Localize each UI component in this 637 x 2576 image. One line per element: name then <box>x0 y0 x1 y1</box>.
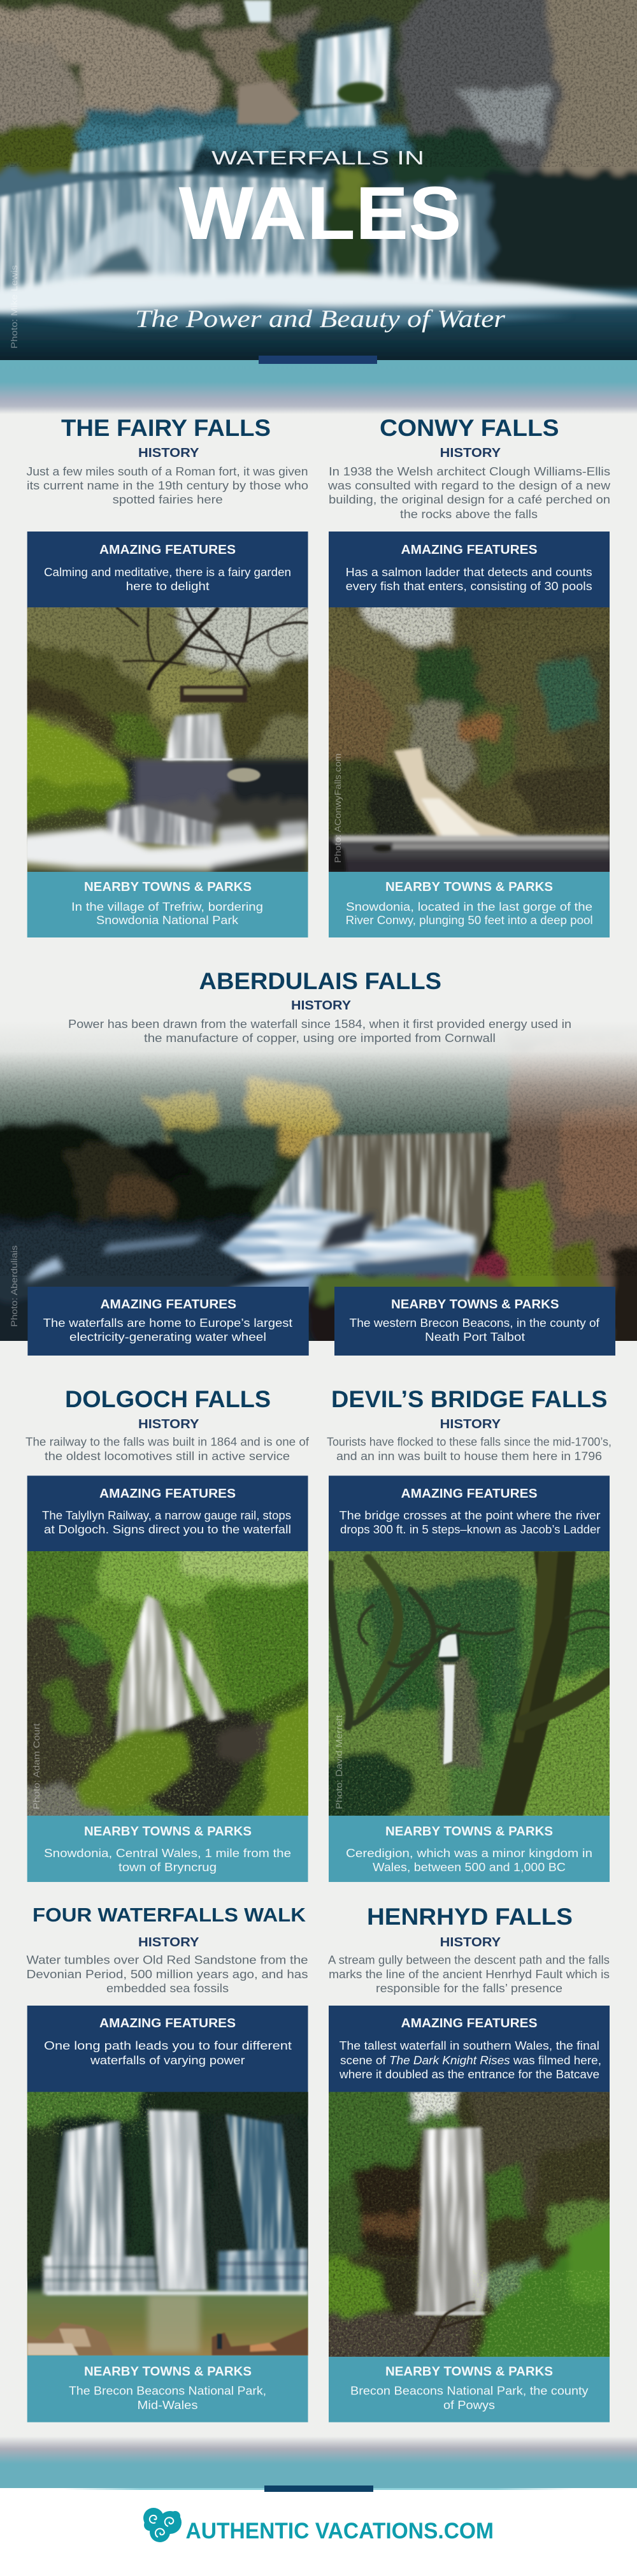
history text: the manufacture of copper, using ore imported from Cornwall <box>144 1032 496 1045</box>
box: amazing features: electricity-generating water wheel <box>69 1331 266 1343</box>
box: nearby towns and parks <box>329 2357 610 2422</box>
box: nearby towns and parks: The western Brecon Beacons, in the county of <box>349 1317 600 1329</box>
heading: dolgoch falls: DOLGOCH FALLS <box>65 1386 271 1412</box>
hero subtitle: The Power and Beauty of Water <box>135 305 506 333</box>
history text <box>25 1436 310 1463</box>
box: amazing features: here to delight <box>126 580 210 593</box>
history text: Just a few miles south of a Roman fort, it was given <box>27 465 308 478</box>
heading: aberdulais falls: ABERDULAIS FALLS <box>199 968 441 994</box>
history text: Tourists have flocked to these falls since the mid-1700’s, <box>327 1436 612 1449</box>
box: nearby towns and parks: NEARBY TOWNS & PARKS <box>84 2364 252 2378</box>
box: amazing features: waterfalls of varying power <box>90 2054 245 2067</box>
history text <box>68 1018 571 1045</box>
history text <box>27 1954 308 1995</box>
history text: Power has been drawn from the waterfall since 1584, when it first provided energy used in <box>68 1018 571 1031</box>
photo credit: aberdulais: Photo: Aberduliais <box>9 1245 19 1327</box>
box: amazing features <box>27 1476 308 1551</box>
box: nearby towns and parks: NEARBY TOWNS & PARKS <box>385 1825 553 1839</box>
history text: the rocks above the falls <box>400 508 538 521</box>
bottom accent bar <box>264 2486 373 2492</box>
photo credit: hero: Photo: Mike Lewis <box>9 265 19 349</box>
box: amazing features <box>27 2006 308 2092</box>
box: amazing features <box>27 1287 309 1356</box>
box: amazing features: where it doubled as the entrance for the Batcave <box>339 2068 599 2081</box>
box: nearby towns and parks <box>27 2355 308 2422</box>
box: nearby towns and parks: Snowdonia, Central Wales, 1 mile from the <box>44 1847 291 1860</box>
box: amazing features: The Talyllyn Railway, a narrow gauge rail, stops <box>42 1509 291 1522</box>
photo: aberdulais falls <box>0 1034 637 1341</box>
photo: conwy falls <box>329 607 610 872</box>
history text: responsible for the falls’ presence <box>376 1982 562 1995</box>
photo: dolgoch falls <box>27 1551 308 1816</box>
hero title line: waterfalls in: WATERFALLS IN <box>211 147 424 169</box>
history text: marks the line of the ancient Henrhyd Fault which is <box>329 1968 610 1981</box>
history text: building, the original design for a café perched on <box>329 493 610 506</box>
box: amazing features: One long path leads you to four different <box>44 2039 292 2052</box>
logo: authentic vacations <box>143 2508 494 2543</box>
panel: aberdulais falls <box>0 968 637 1359</box>
box: nearby towns and parks: The Brecon Beacons National Park, <box>69 2385 266 2398</box>
hero title: wales: WALES <box>178 171 461 256</box>
box: nearby towns and parks: town of Bryncrug <box>118 1861 217 1874</box>
box: nearby towns and parks: NEARBY TOWNS & PARKS <box>84 880 252 894</box>
box: amazing features <box>329 2006 610 2092</box>
panel: henrhyd falls <box>310 1904 628 2422</box>
footer background <box>0 2488 637 2576</box>
top falls <box>312 27 390 106</box>
history text: The railway to the falls was built in 1864 and is one of <box>25 1436 310 1449</box>
history text: and an inn was built to house them here in 1796 <box>336 1450 602 1463</box>
box: nearby towns and parks <box>27 872 308 937</box>
box: nearby towns and parks: Snowdonia, located in the last gorge of the <box>346 901 592 913</box>
subheading: history: HISTORY <box>138 1936 199 1950</box>
subheading: history: HISTORY <box>440 446 501 460</box>
photo: henrhyd falls <box>329 2092 610 2357</box>
photo: devil's bridge falls <box>329 1551 610 1816</box>
history text <box>327 1436 612 1463</box>
box: amazing features: The tallest waterfall in southern Wales, the final <box>339 2039 599 2052</box>
box: amazing features <box>27 532 308 607</box>
top gradient band <box>0 360 637 414</box>
box: amazing features: The waterfalls are home to Europe’s largest <box>43 1317 292 1329</box>
history text <box>327 465 611 521</box>
box: amazing features: AMAZING FEATURES <box>401 2016 538 2030</box>
top accent bar <box>259 356 377 364</box>
box: nearby towns and parks: NEARBY TOWNS & PARKS <box>391 1298 559 1312</box>
top fade over aberdulais photo <box>0 1021 637 1212</box>
box: nearby towns and parks: Snowdonia National Park <box>96 914 239 927</box>
history text <box>27 465 308 506</box>
box: nearby towns and parks: Mid-Wales <box>138 2399 197 2412</box>
history text: embedded sea fossils <box>106 1982 229 1995</box>
bottom highlight line <box>64 2488 573 2490</box>
history text: its current name in the 19th century by those who <box>27 479 308 492</box>
box: nearby towns and parks <box>329 872 610 937</box>
heading: conwy falls: CONWY FALLS <box>380 415 559 441</box>
photo: fairy falls <box>27 607 308 872</box>
box: amazing features: every fish that enters, consisting of 30 pools <box>346 580 592 593</box>
photo credit: devil's bridge: Photo: David Merrett <box>334 1715 344 1809</box>
heading: henrhyd falls: HENRHYD FALLS <box>367 1904 573 1930</box>
subheading: history: HISTORY <box>440 1936 501 1950</box>
box: amazing features: AMAZING FEATURES <box>101 1298 236 1312</box>
box: amazing features: AMAZING FEATURES <box>99 1487 236 1501</box>
history text: Water tumbles over Old Red Sandstone from the <box>27 1954 308 1967</box>
box: amazing features <box>329 532 610 607</box>
photo credit: conwy: Photo: AConwyFalls.com <box>333 753 343 863</box>
box: nearby towns and parks <box>334 1287 615 1356</box>
subheading: history: HISTORY <box>291 999 352 1013</box>
history text: spotted fairies here <box>113 493 223 506</box>
bottom gradient band <box>0 2436 637 2488</box>
box: amazing features: AMAZING FEATURES <box>99 2016 236 2030</box>
box: nearby towns and parks <box>329 1816 610 1882</box>
panel: the fairy falls <box>8 415 327 937</box>
subheading: history: HISTORY <box>440 1417 501 1431</box>
box: amazing features: AMAZING FEATURES <box>401 543 538 557</box>
panel: four waterfalls walk <box>8 1904 326 2422</box>
photo credit: dolgoch: Photo: Adam Court <box>31 1723 41 1809</box>
box: nearby towns and parks: NEARBY TOWNS & PARKS <box>84 1825 252 1839</box>
panel: conwy falls <box>310 415 628 937</box>
box: nearby towns and parks: Wales, between 500 and 1,000 BC <box>373 1861 566 1874</box>
subheading: history: HISTORY <box>138 446 199 460</box>
box: nearby towns and parks <box>27 1816 308 1882</box>
hero section <box>0 0 637 373</box>
panel: dolgoch falls <box>8 1386 327 1882</box>
history text: Devonian Period, 500 million years ago, and has <box>27 1968 308 1981</box>
box: amazing features: drops 300 ft. in 5 steps–known as Jacob’s Ladder <box>340 1523 601 1536</box>
panel: devil's bridge falls <box>310 1386 628 1882</box>
wordmark: AUTHENTIC VACATIONS.COM <box>186 2519 494 2543</box>
box: nearby towns and parks: Brecon Beacons National Park, the county <box>350 2385 589 2398</box>
hero photo: tiered waterfall <box>0 0 637 360</box>
box: nearby towns and parks: River Conwy, plunging 50 feet into a deep pool <box>346 914 593 927</box>
falls strands <box>117 1595 194 1742</box>
history text: the oldest locomotives still in active service <box>45 1450 290 1463</box>
icon: triple spiral cloud <box>143 2508 182 2542</box>
box: nearby towns and parks: NEARBY TOWNS & PARKS <box>385 880 553 894</box>
box: nearby towns and parks: Ceredigion, which was a minor kingdom in <box>346 1847 592 1860</box>
heading: devil's bridge falls: DEVIL’S BRIDGE FALLS <box>331 1386 608 1412</box>
subheading: history: HISTORY <box>138 1417 199 1431</box>
box: amazing features: Has a salmon ladder that detects and counts <box>346 566 592 579</box>
box: amazing features: scene of The Dark Knight Rises was filmed here, <box>340 2054 601 2067</box>
box: amazing features: AMAZING FEATURES <box>99 543 236 557</box>
box: amazing features <box>329 1476 610 1551</box>
box: amazing features: The bridge crosses at the point where the river <box>339 1509 600 1522</box>
box: nearby towns and parks: NEARBY TOWNS & PARKS <box>385 2364 553 2378</box>
box: nearby towns and parks: In the village of Trefriw, bordering <box>71 901 263 913</box>
history text: was consulted with regard to the design of a new <box>327 479 611 492</box>
history text: A stream gully between the descent path and the falls <box>328 1954 610 1967</box>
box: nearby towns and parks: Neath Port Talbot <box>425 1331 525 1343</box>
history text <box>328 1954 610 1995</box>
history text: In 1938 the Welsh architect Clough Williams-Ellis <box>329 465 610 478</box>
heading: four waterfalls walk: FOUR WATERFALLS WALK <box>32 1904 306 1926</box>
heading: the fairy falls: THE FAIRY FALLS <box>61 415 271 441</box>
box: amazing features: at Dolgoch. Signs direct you to the waterfall <box>44 1523 291 1536</box>
box: amazing features: AMAZING FEATURES <box>401 1487 538 1501</box>
box: amazing features: Calming and meditative, there is a fairy garden <box>44 566 291 579</box>
box: nearby towns and parks: of Powys <box>443 2399 495 2412</box>
photo: four waterfalls <box>27 2092 308 2355</box>
